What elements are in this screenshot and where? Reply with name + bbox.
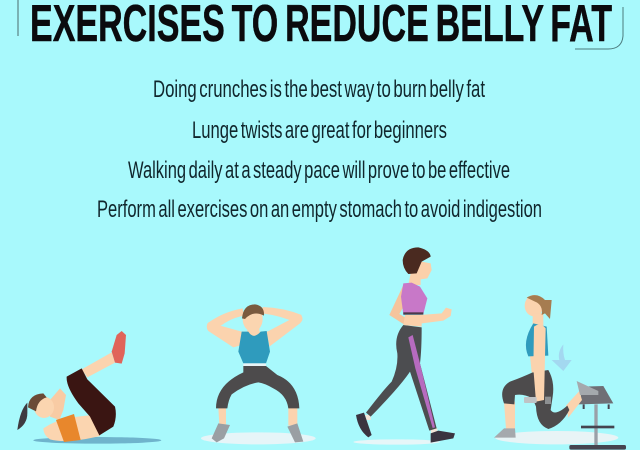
bench [569, 386, 626, 450]
figure: lunge with bench [494, 295, 626, 450]
figure: crunches [17, 331, 161, 444]
figure: squat [201, 304, 316, 444]
tips text block: Doing crunches is the best way to burn belly fat [153, 76, 485, 103]
tips text block: Lunge twists are great for beginners [192, 117, 447, 144]
figure: walking [353, 247, 455, 445]
icon: down arrow [552, 344, 572, 371]
tips text block [97, 76, 542, 223]
